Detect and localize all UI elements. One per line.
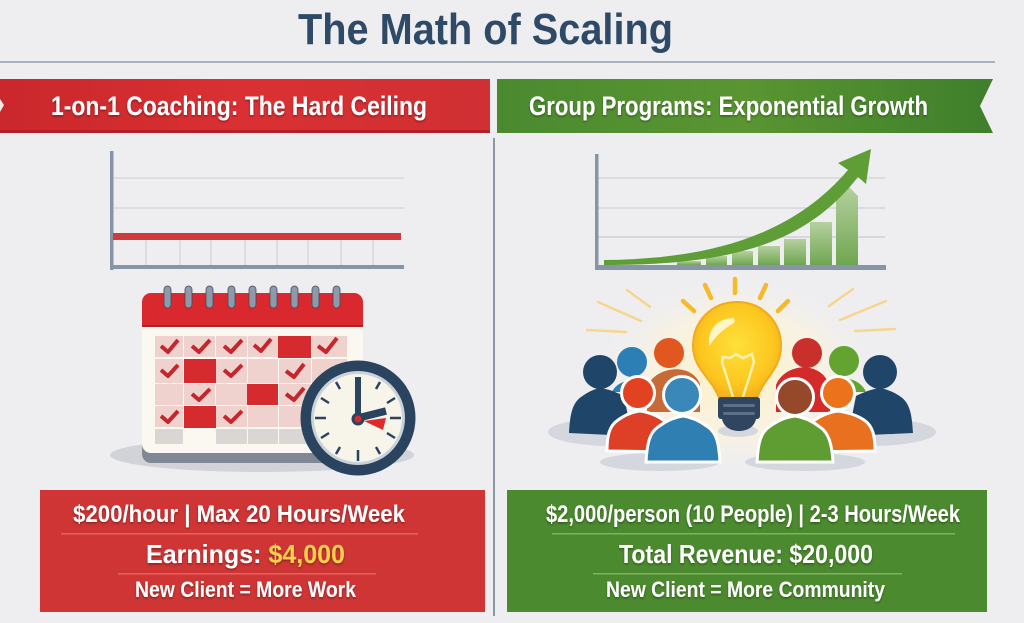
stat: new client more community: New Client = More Community [606, 577, 886, 602]
back row people [612, 338, 866, 412]
growth arrow [604, 149, 871, 265]
flat red line [113, 233, 401, 240]
person: green front [757, 378, 833, 462]
person: navy right [848, 355, 913, 436]
chart: exponential growth [595, 149, 886, 270]
person: navy left [569, 355, 632, 436]
ground shadows [548, 418, 936, 471]
calendar check marks [161, 338, 337, 422]
banner heading: 1-on-1 coaching: 1-on-1 Coaching: The Hard Ceiling [51, 91, 427, 121]
stat: earnings: Earnings: $4,000 [146, 539, 345, 569]
panel: group programs banner [497, 79, 993, 133]
center divider [493, 138, 495, 616]
chart: flat earnings ceiling [110, 151, 404, 270]
light rays [587, 289, 895, 332]
clock [300, 360, 416, 476]
icon: lightbulb with group of people [548, 270, 936, 480]
stat: total revenue: Total Revenue: $20,000 [619, 539, 873, 569]
growth bars [677, 187, 858, 265]
panel: 1-on-1 stats [40, 490, 485, 612]
light bulb [693, 302, 781, 431]
panel: 1-on-1 coaching banner [0, 79, 490, 133]
stat: rate and hours: $200/hour | Max 20 Hours/Week [73, 501, 406, 528]
icon: calendar with clock [110, 286, 416, 476]
banner heading: group programs: Group Programs: Exponential Growth [529, 91, 928, 121]
ground shadow [110, 438, 414, 472]
calendar rings [164, 286, 340, 308]
glow [587, 270, 887, 480]
title: The Math of Scaling [298, 5, 673, 54]
stat: new client more work: New Client = More Work [135, 577, 357, 602]
person: orange front [800, 376, 875, 452]
calendar body [142, 300, 363, 463]
header rule [0, 61, 995, 63]
person: blue front [646, 376, 720, 462]
calendar grid cells [155, 336, 347, 427]
panel: group program stats [507, 490, 987, 612]
person: red front [607, 376, 674, 452]
